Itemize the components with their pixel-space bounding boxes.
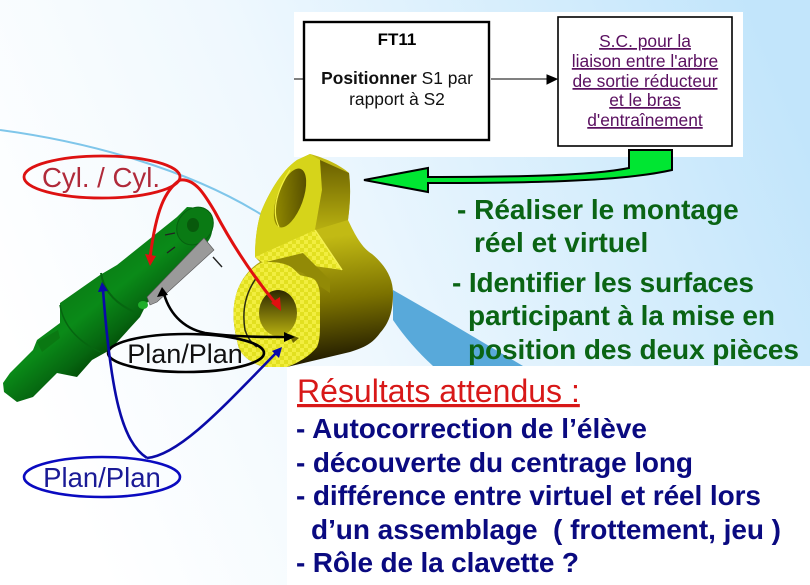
text block: results list: d’un assemblage ( frottement, jeu ) [311, 514, 781, 545]
panel: results background [287, 366, 810, 585]
text block: results list: - différence entre virtuel et réel lors [296, 480, 761, 511]
callout: Cyl. / Cyl. [24, 156, 180, 198]
icon: yellow lever [234, 154, 393, 367]
lever front face [234, 262, 320, 367]
icon: bore [259, 290, 297, 336]
callout: Plan/Plan blue: Plan/Plan [43, 462, 161, 493]
small axis arrows [165, 233, 222, 267]
arrow: green curved arrow [364, 150, 672, 192]
heading: expected results: Résultats attendus : [297, 373, 580, 409]
box: FT11: rapport à S2 [349, 89, 445, 109]
box: solution constructive: S.C. pour la [599, 31, 691, 51]
text block: tasks: réel et virtuel [474, 227, 648, 258]
box: FT11 [304, 22, 489, 140]
input line [294, 78, 304, 80]
panel: functional diagram [294, 12, 743, 157]
text block: results list [296, 413, 781, 578]
box: FT11: FT11 [378, 30, 416, 49]
text block: tasks: participant à la mise en [468, 300, 775, 331]
text block: results list: - Autocorrection de l’élève [296, 413, 647, 444]
box: solution constructive: de sortie réducteur [572, 71, 718, 91]
blue swoosh wedge [393, 290, 523, 366]
callout: Plan/Plan black: Plan/Plan [127, 339, 243, 369]
box: solution constructive: d'entraînement [587, 110, 703, 130]
box: solution constructive: et le bras [609, 90, 681, 110]
text block: results list: - Rôle de la clavette ? [296, 547, 579, 578]
connector: blue plan curves [98, 282, 282, 458]
icon: upper hole [267, 164, 313, 232]
blue swoosh line [0, 130, 262, 215]
callout: Cyl. / Cyl.: Cyl. / Cyl. [42, 162, 160, 193]
text block: tasks: - Réaliser le montage [457, 194, 739, 225]
icon: green shaft [3, 200, 222, 402]
box: solution constructive [558, 17, 732, 146]
icon: grey key [147, 238, 214, 305]
callout: Plan/Plan blue [24, 457, 180, 497]
connector: black plan curve [157, 287, 295, 342]
connector: red cylinder curves [145, 180, 281, 311]
arrow: FT11 to solution [491, 75, 557, 84]
text block: tasks: - Identifier les surfaces [452, 267, 754, 298]
box: solution constructive: liaison entre l'arbre [572, 51, 718, 71]
text block: results list: - découverte du centrage long [296, 447, 693, 478]
callout: Plan/Plan black [108, 334, 264, 372]
box: FT11: Positionner S1 par [321, 68, 473, 88]
text block: tasks [452, 194, 799, 365]
text block: tasks: position des deux pièces [468, 334, 799, 365]
